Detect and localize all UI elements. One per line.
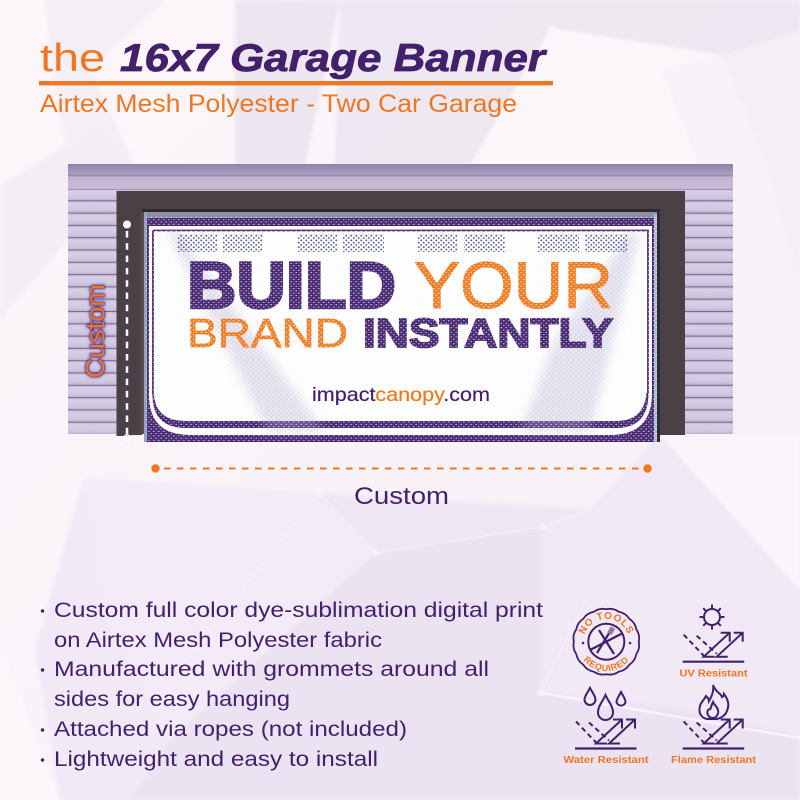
title underline bbox=[39, 81, 553, 85]
icon: flame resistant bbox=[671, 685, 757, 766]
icon: no tools required badge: NO TOOLS bbox=[578, 612, 634, 634]
banner headline: BRAND bbox=[187, 310, 348, 356]
icon: no tools required badge bbox=[572, 608, 640, 676]
height label: Custom bbox=[80, 284, 110, 378]
icon: water resistant bbox=[564, 688, 649, 766]
height label: Custom bbox=[80, 284, 110, 378]
icon: no tools required badge: REQUIRED bbox=[584, 656, 628, 672]
icon: water resistant: Water Resistant bbox=[564, 754, 649, 766]
subtitle: Airtex Mesh Polyester - Two Car Garage bbox=[40, 90, 517, 118]
width label: Custom bbox=[354, 483, 449, 510]
title: the bbox=[40, 37, 105, 80]
icon: UV resistant: UV Resistant bbox=[680, 668, 748, 680]
siding wall bbox=[68, 164, 733, 434]
banner background and border bbox=[147, 218, 654, 442]
garage door illustration bbox=[68, 164, 733, 442]
mesh perforation overlay bbox=[146, 217, 657, 442]
icon: flame resistant: Flame Resistant bbox=[671, 754, 757, 766]
banner headline: BUILD bbox=[187, 248, 396, 322]
printed mesh banner bbox=[146, 217, 657, 442]
feature bullet list: sides for easy hanging bbox=[54, 687, 290, 711]
feature bullet list: Attached via ropes (not included) bbox=[54, 717, 407, 741]
banner headline bbox=[190, 261, 614, 348]
width dimension line bbox=[151, 464, 652, 473]
height dimension line bbox=[123, 220, 131, 442]
banner fold shadows bbox=[166, 228, 640, 432]
dark door trim bbox=[116, 191, 685, 442]
speckled top panels bbox=[177, 234, 627, 252]
feature bullet list: Manufactured with grommets around all bbox=[54, 657, 489, 681]
banner headline: YOUR bbox=[414, 248, 613, 322]
feature bullet list: Custom full color dye-sublimation digital print bbox=[54, 598, 543, 622]
feature bullet list bbox=[41, 598, 543, 771]
icon: UV resistant bbox=[680, 604, 748, 680]
feature bullet list: on Airtex Mesh Polyester fabric bbox=[54, 628, 382, 652]
feature bullet list: Lightweight and easy to install bbox=[54, 747, 378, 771]
banner url: impact canopy .com bbox=[312, 384, 490, 406]
title: 16x7 Garage Banner bbox=[120, 37, 547, 80]
banner headline: INSTANTLY bbox=[363, 310, 613, 356]
